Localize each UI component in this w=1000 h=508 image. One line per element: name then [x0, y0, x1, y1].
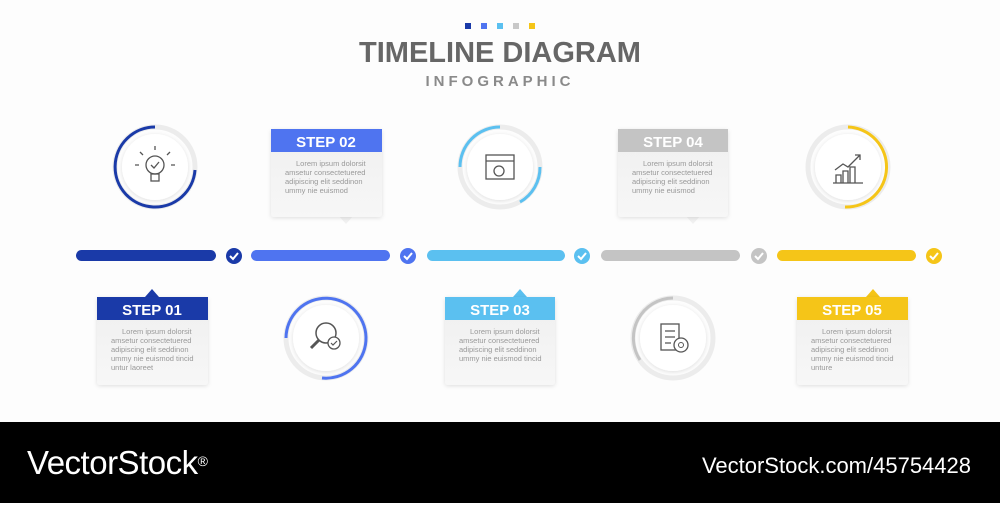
- step 04 box: amsetur consectetuered: [632, 168, 712, 177]
- step 03 box: ummy nie euismod tincid: [459, 354, 542, 363]
- step 05 box: unture: [811, 363, 832, 372]
- step 01 box: Lorem ipsum dolorsit: [122, 327, 193, 336]
- circle 2: magnifier: [286, 298, 366, 378]
- step 03 box: [445, 289, 555, 385]
- step 03 box: Lorem ipsum dolorsit: [470, 327, 541, 336]
- subtitle: INFOGRAPHIC: [426, 73, 574, 90]
- step 04 box: Lorem ipsum dolorsit: [643, 159, 714, 168]
- circle 1: bulb: [115, 127, 195, 207]
- color squares: [465, 23, 535, 29]
- step 04 box: ummy nie euismod: [632, 186, 695, 195]
- footer bar: [0, 422, 1000, 503]
- footer bar: VectorStock.com/45754428: [702, 453, 971, 478]
- step 04 box: [618, 129, 728, 224]
- step 04 box: adipiscing elit seddinon: [632, 177, 710, 186]
- circle 3: browser: [460, 127, 540, 207]
- step 03 box: STEP 03: [470, 302, 530, 319]
- step 01 box: untur laoreet: [111, 363, 154, 372]
- step 03 box: amsetur consectetuered: [459, 336, 539, 345]
- title: TIMELINE DIAGRAM: [359, 37, 641, 69]
- step 02 box: [271, 129, 382, 224]
- circle 4: checklist: [633, 298, 713, 378]
- step 01 box: adipiscing elit seddinon: [111, 345, 189, 354]
- step 05 box: Lorem ipsum dolorsit: [822, 327, 893, 336]
- timeline bars: [76, 248, 942, 264]
- step 01 box: [97, 289, 208, 385]
- footer bar: VectorStock®: [27, 444, 209, 481]
- step 05 box: adipiscing elit seddinon: [811, 345, 889, 354]
- step 02 box: adipiscing elit seddinon: [285, 177, 363, 186]
- step 02 box: amsetur consectetuered: [285, 168, 365, 177]
- step 02 box: STEP 02: [296, 134, 356, 151]
- step 02 box: ummy nie euismod: [285, 186, 348, 195]
- circle 5: chart: [808, 127, 888, 207]
- step 01 box: ummy nie euismod tincid: [111, 354, 194, 363]
- step 05 box: amsetur consectetuered: [811, 336, 891, 345]
- step 05 box: ummy nie euismod tincid: [811, 354, 894, 363]
- step 01 box: STEP 01: [122, 302, 182, 319]
- step 05 box: [797, 289, 908, 385]
- step 03 box: adipiscing elit seddinon: [459, 345, 537, 354]
- step 04 box: STEP 04: [643, 134, 704, 151]
- step 05 box: STEP 05: [822, 302, 882, 319]
- step 02 box: Lorem ipsum dolorsit: [296, 159, 367, 168]
- step 01 box: amsetur consectetuered: [111, 336, 191, 345]
